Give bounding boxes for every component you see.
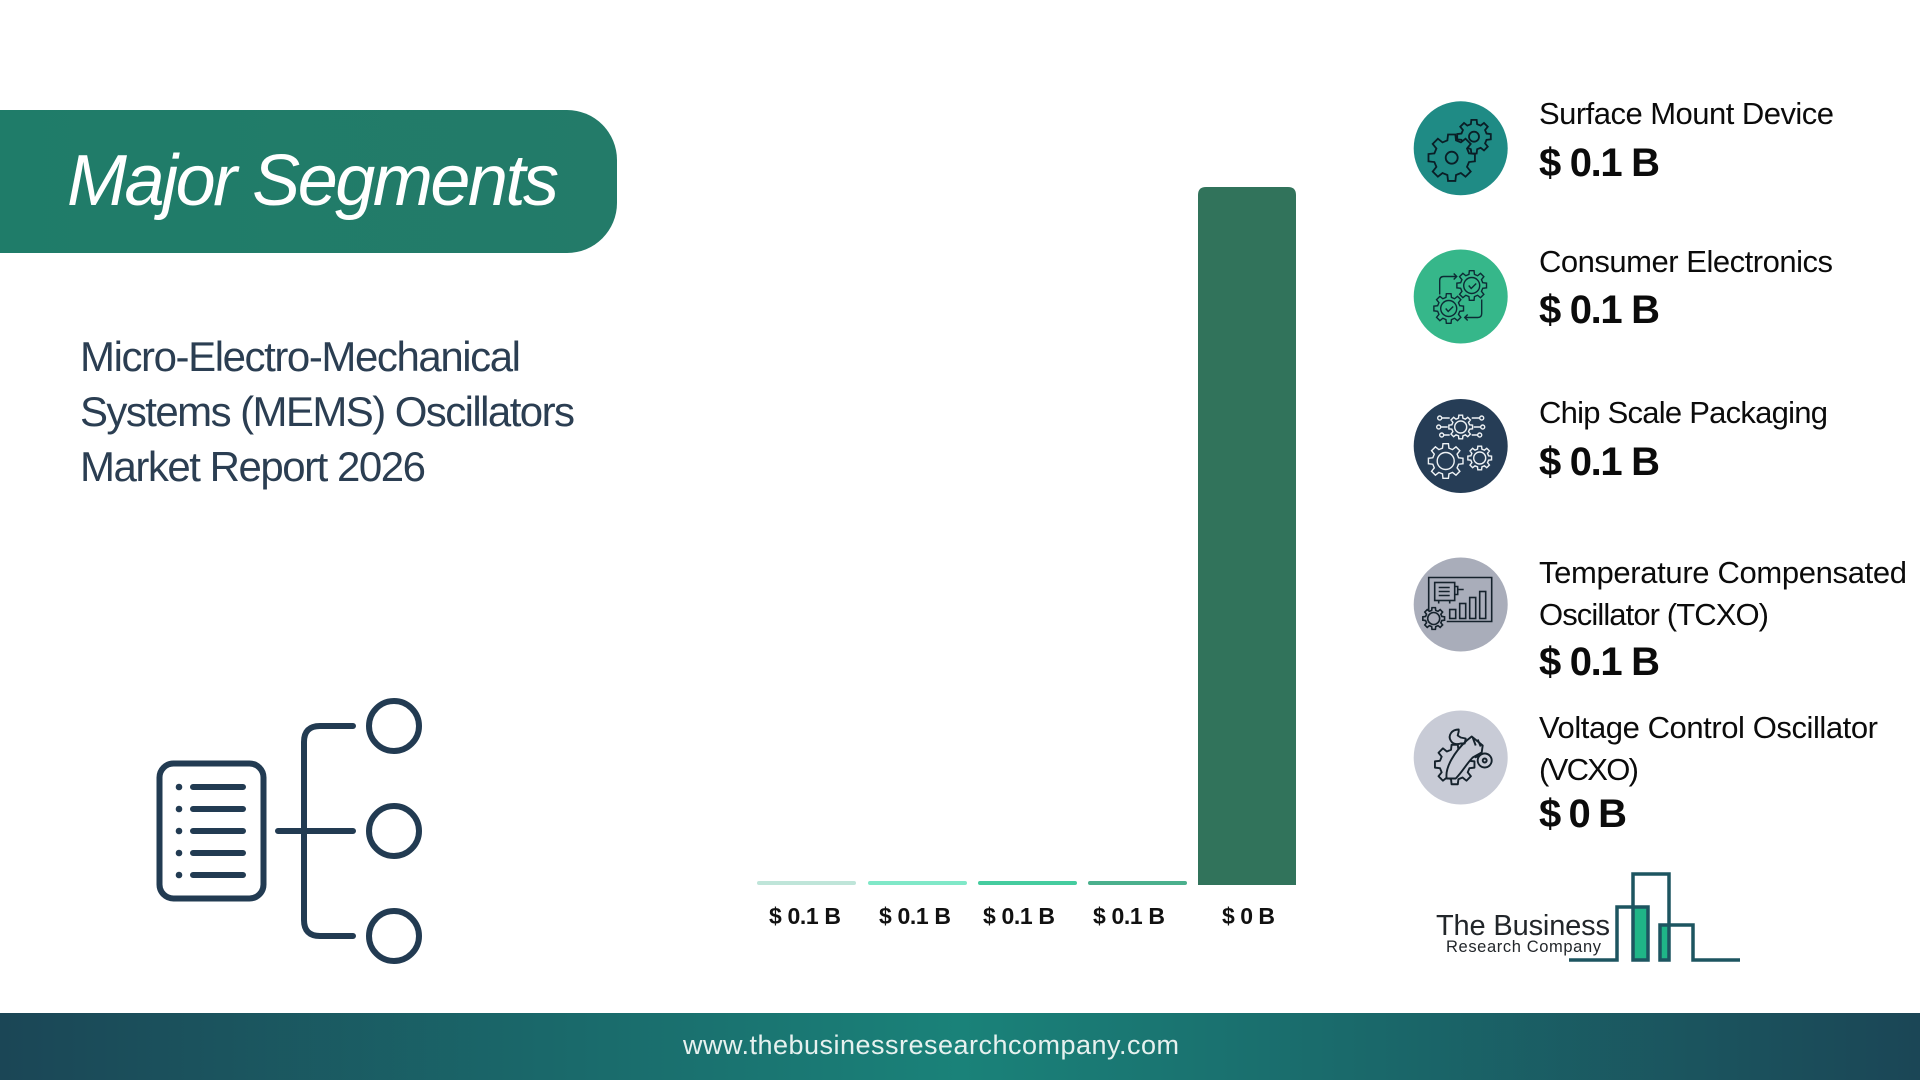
segment: Voltage Control Oscillator: (VCXO) <box>1539 752 1639 787</box>
bar chart: $ 0.1 B <box>879 903 951 929</box>
report subtitle: Micro-Electro-Mechanical <box>80 333 521 380</box>
segment: Surface Mount Device <box>1414 96 1834 195</box>
segment: Surface Mount Device: $ 0.1 B <box>1539 141 1660 185</box>
segment: Temperature Compensated Oscillator <box>1414 555 1907 684</box>
company logo <box>1436 874 1740 960</box>
segment: Consumer Electronics: $ 0.1 B <box>1539 288 1660 332</box>
segment: Temperature Compensated Oscillator: Oscillator (TCXO) <box>1539 597 1769 632</box>
segment: Temperature Compensated Oscillator: Temperature Compensated <box>1539 555 1907 590</box>
segment: Temperature Compensated Oscillator: $ 0.1 B <box>1539 640 1660 684</box>
report subtitle <box>80 333 575 490</box>
segment: Consumer Electronics: Consumer Electronics <box>1539 244 1833 279</box>
segment: Surface Mount Device: Surface Mount Device <box>1539 96 1834 131</box>
bar chart: $ 0.1 B <box>769 903 841 929</box>
bar chart <box>757 187 1296 929</box>
report subtitle: Systems (MEMS) Oscillators <box>80 388 575 435</box>
segment: Consumer Electronics <box>1414 244 1833 344</box>
bar chart: $ 0.1 B <box>1093 903 1165 929</box>
footer url: www.thebusinessresearchcompany.com <box>682 1030 1179 1060</box>
title text: Major Segments <box>67 141 559 221</box>
segment: Voltage Control Oscillator: $ 0 B <box>1539 792 1627 836</box>
segment: Voltage Control Oscillator: Voltage Control Oscillator <box>1539 710 1878 745</box>
title banner <box>0 110 617 253</box>
bar chart: $ 0 B <box>1222 903 1275 929</box>
segment: Chip Scale Packaging <box>1414 395 1828 493</box>
company logo: The Business <box>1436 910 1610 942</box>
icon: document with branching segments <box>160 701 419 961</box>
segment: Voltage Control Oscillator <box>1414 710 1878 836</box>
company logo: Research Company <box>1446 938 1602 956</box>
segment: Chip Scale Packaging: $ 0.1 B <box>1539 440 1660 484</box>
report subtitle: Market Report 2026 <box>80 443 426 490</box>
footer bar <box>0 1013 1920 1080</box>
segment: Chip Scale Packaging: Chip Scale Packaging <box>1539 395 1828 430</box>
bar chart: $ 0.1 B <box>983 903 1055 929</box>
